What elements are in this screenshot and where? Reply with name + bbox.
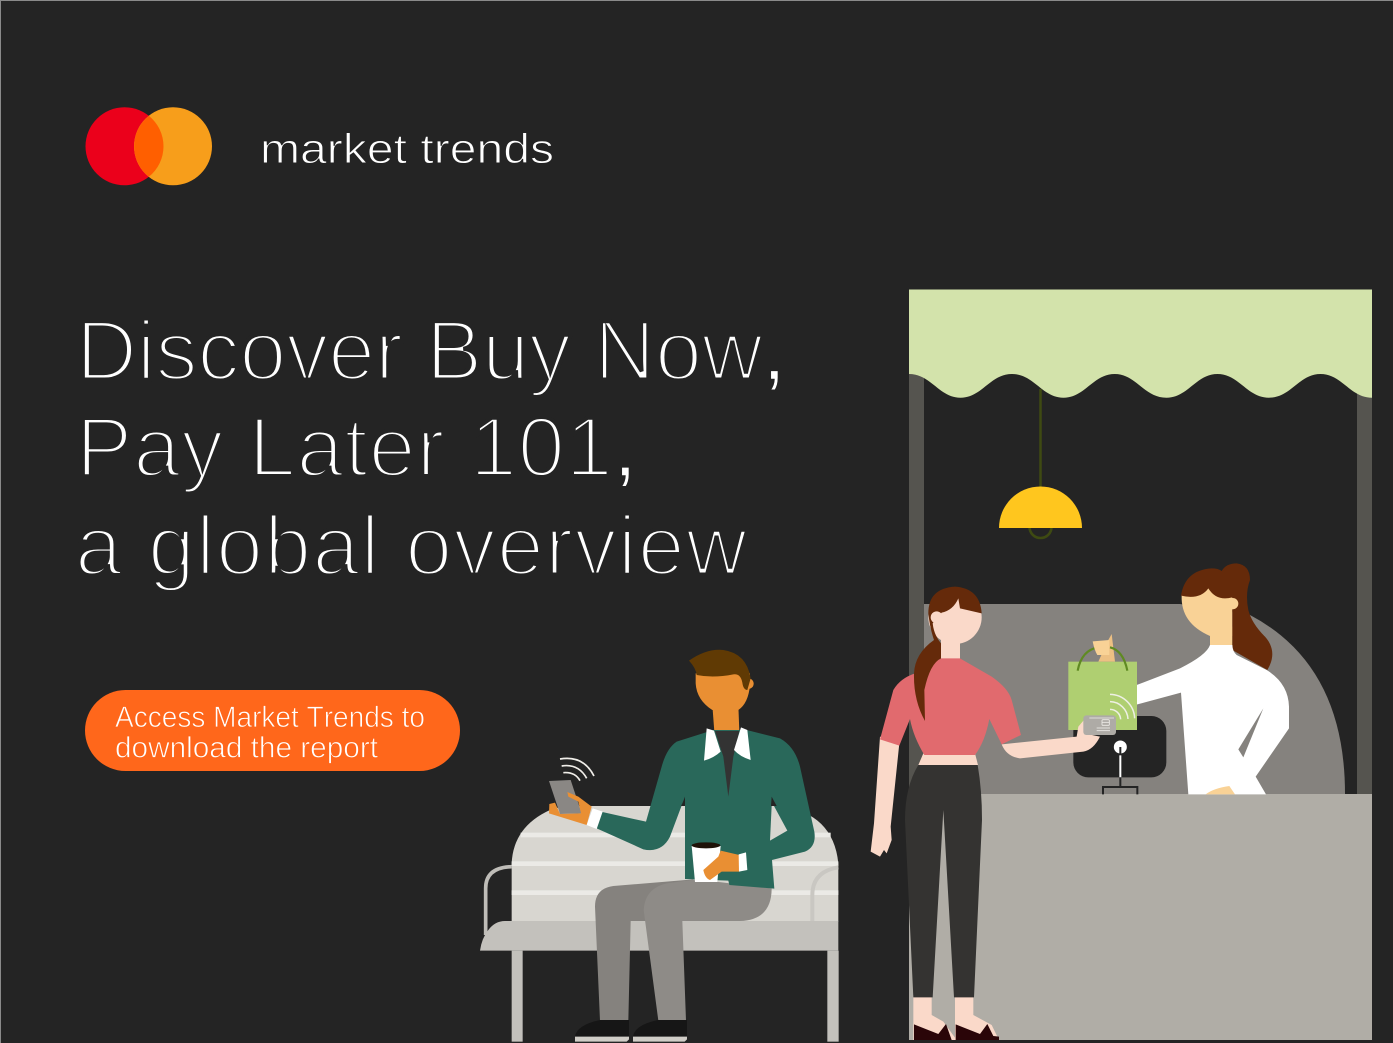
stall pillars — [909, 374, 1372, 1040]
cashier hair — [1181, 563, 1272, 670]
cashier body — [1135, 645, 1289, 794]
shopper left arm — [871, 737, 899, 857]
man shoes — [575, 1020, 687, 1042]
shopping bag — [1068, 634, 1137, 730]
cashier — [1135, 563, 1289, 794]
man t-shirt — [715, 731, 739, 797]
man collar — [704, 727, 751, 761]
title: Pay Later 101, — [76, 400, 637, 494]
stall back wall — [924, 604, 1345, 794]
cashier neck and head — [1210, 627, 1232, 648]
man neck and head — [712, 705, 739, 732]
button: access report — [85, 690, 460, 771]
awning — [909, 290, 1372, 398]
hanging lamp — [999, 389, 1082, 538]
payment terminal — [1073, 716, 1166, 794]
man back leg — [595, 879, 693, 1021]
bench armrests — [486, 867, 512, 935]
shopper neck and head — [941, 632, 960, 660]
title: a global overview — [75, 499, 748, 593]
man front leg — [644, 879, 772, 1021]
phone — [549, 780, 582, 814]
button: access report: Access Market Trends to — [115, 701, 425, 734]
title — [75, 304, 786, 593]
bench back — [512, 806, 838, 922]
bench — [480, 806, 839, 1042]
man cup cuff — [739, 852, 747, 872]
bench seat — [480, 921, 838, 951]
market stall — [909, 290, 1372, 1040]
counter — [909, 794, 1372, 1040]
button: access report: download the report — [115, 732, 379, 764]
man shirt cuff — [587, 808, 603, 829]
man jacket — [597, 730, 815, 889]
man cup hand — [703, 851, 739, 880]
shopper top — [880, 658, 1021, 755]
man hair — [689, 650, 751, 690]
shopper woman — [871, 587, 1116, 1040]
shopper sandals — [914, 1024, 999, 1040]
shopper feet — [913, 995, 999, 1040]
shopper right arm — [1002, 716, 1100, 758]
shopper trousers — [905, 765, 982, 997]
logo: overlapping circles — [86, 107, 212, 185]
shopper hair — [914, 587, 982, 721]
title: Discover Buy Now, — [76, 304, 786, 398]
wifi signal — [560, 758, 594, 781]
coffee cup — [692, 842, 721, 882]
seated man — [549, 650, 815, 1042]
bench legs — [512, 951, 523, 1042]
man phone hand — [549, 792, 592, 825]
shopper midriff — [918, 753, 978, 765]
payment card — [1083, 715, 1116, 735]
wifi signal on bag — [1110, 694, 1135, 719]
brand text: market trends: market trends — [260, 125, 554, 172]
